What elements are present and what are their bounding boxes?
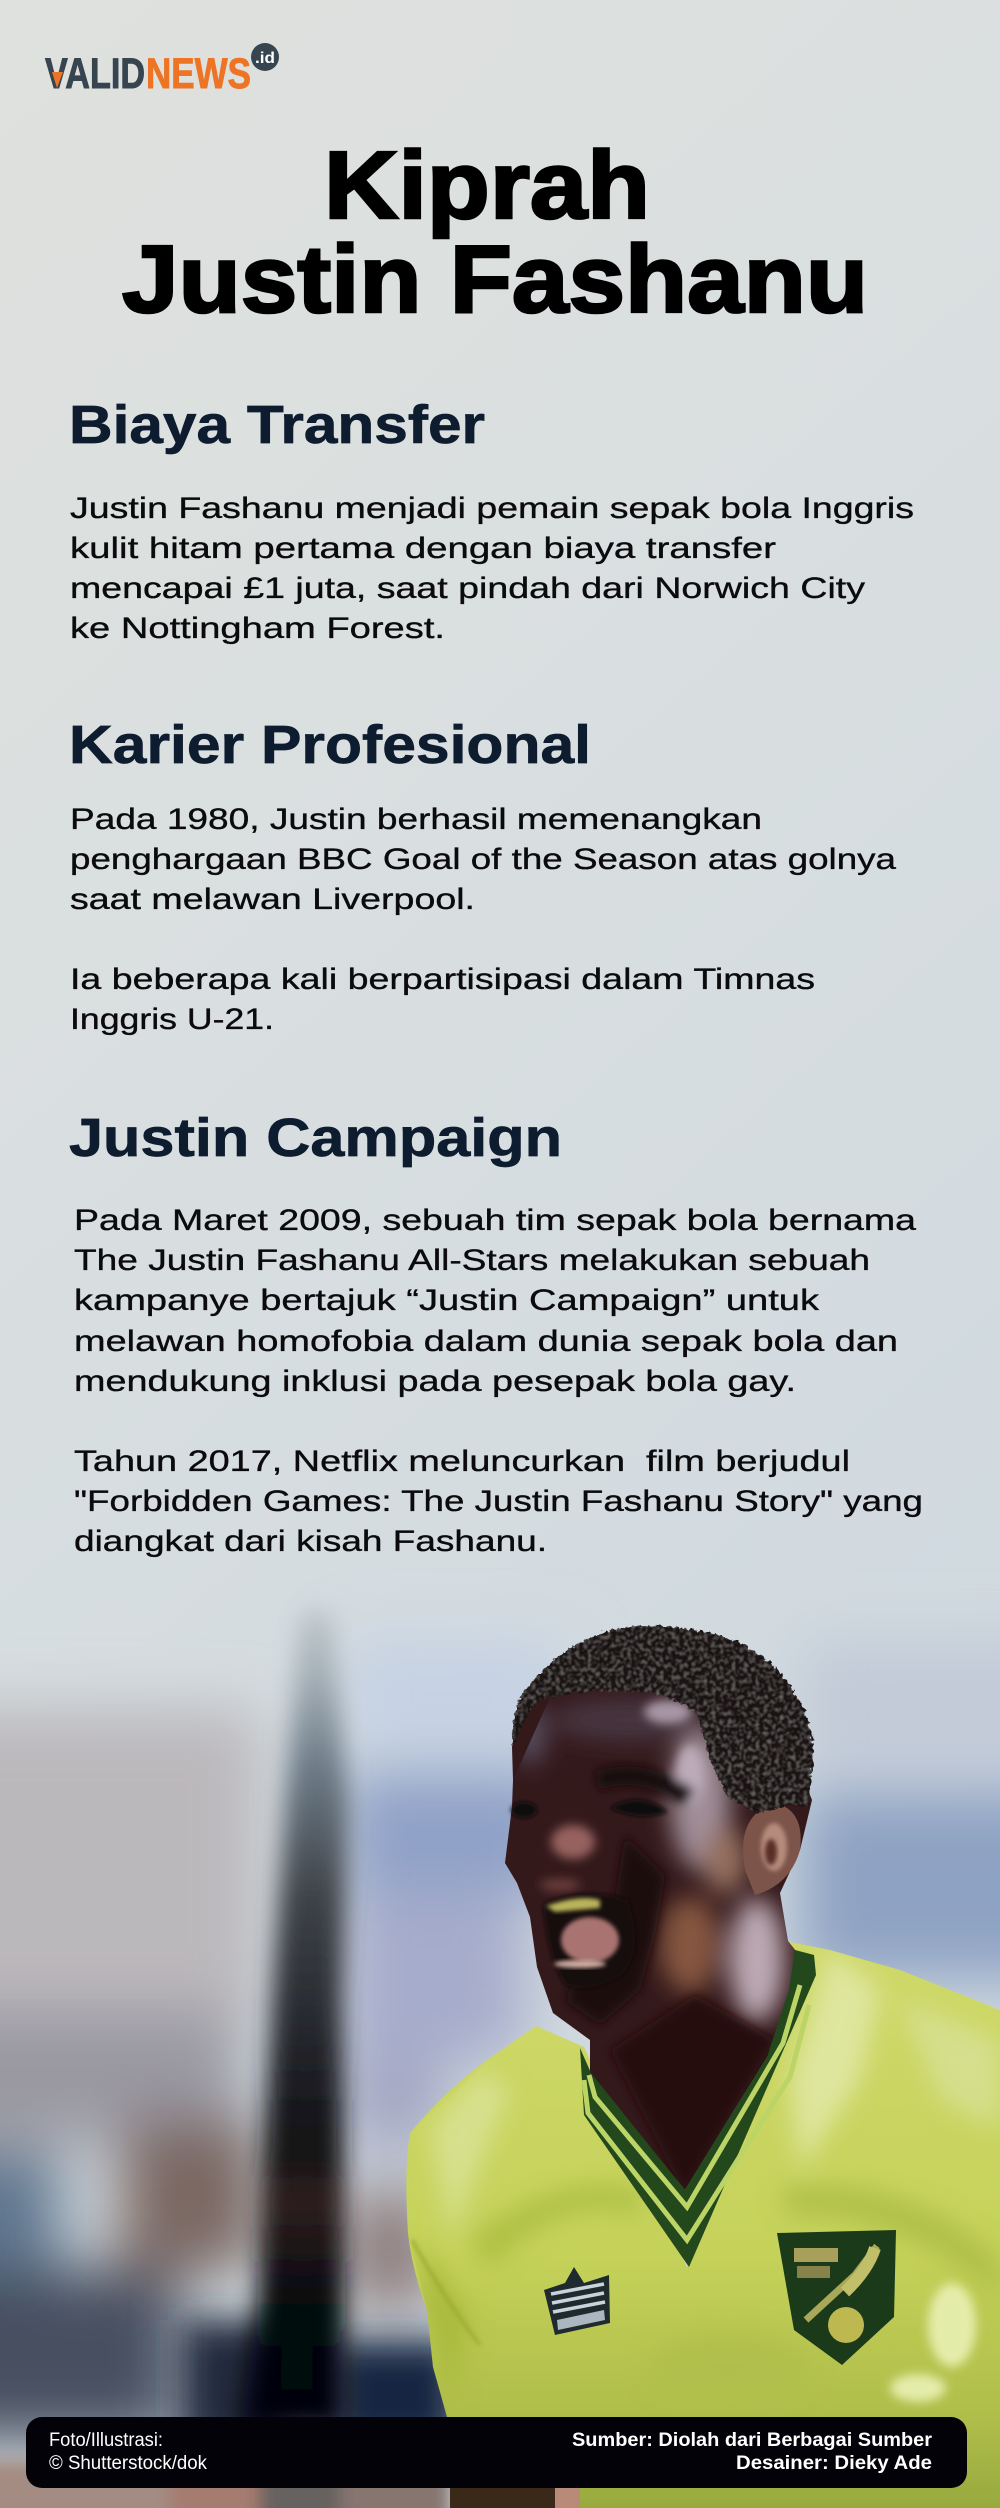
blurred navy patch beside pillar	[180, 2320, 460, 2450]
section: Karier Profesional	[69, 715, 896, 1036]
body text: kulit hitam pertama dengan biaya transfer	[70, 532, 776, 565]
blurred stadium background	[0, 1640, 1000, 2440]
body text: saat melawan Liverpool.	[70, 883, 475, 916]
body text: Pada 1980, Justin berhasil memenangkan	[70, 803, 762, 836]
body text	[70, 803, 896, 1036]
heading: Karier Profesional	[69, 715, 591, 775]
logo: Validnews.id: VALID	[45, 50, 145, 98]
body text: melawan homofobia dalam dunia sepak bola dan	[74, 1325, 898, 1358]
body text: diangkat dari kisah Fashanu.	[74, 1525, 547, 1558]
body text: Justin Fashanu menjadi pemain sepak bola Inggris	[70, 492, 914, 525]
badge: Admiral logo	[544, 2267, 610, 2335]
logo: Validnews.id: NEWS	[146, 50, 251, 98]
body text: Inggris U-21.	[70, 1003, 274, 1036]
source and designer credit: Sumber: Diolah dari Berbagai Sumber	[572, 2430, 933, 2451]
photo credit: Foto/Illustrasi:	[49, 2430, 163, 2451]
body text: penghargaan BBC Goal of the Season atas golnya	[70, 843, 896, 876]
body text: "Forbidden Games: The Justin Fashanu Story" yang	[74, 1485, 923, 1518]
title: Justin Fashanu	[122, 226, 868, 333]
body text: Ia beberapa kali berpartisipasi dalam Timnas	[70, 963, 815, 996]
heading: Biaya Transfer	[69, 395, 485, 455]
source and designer credit	[572, 2430, 933, 2474]
hair	[512, 1625, 813, 1813]
body text: ke Nottingham Forest.	[70, 612, 445, 645]
section: Biaya Transfer	[69, 395, 914, 645]
photo credit: © Shutterstock/dok	[49, 2453, 207, 2474]
body text: kampanye bertajuk “Justin Campaign” untuk	[74, 1284, 820, 1317]
ear	[743, 1803, 801, 1895]
body text: mencapai £1 juta, saat pindah dari Norwich City	[70, 572, 865, 605]
eyes	[511, 1800, 668, 1818]
dark strip below shirt at the bottom	[450, 2488, 555, 2508]
mouth	[543, 1893, 635, 1988]
body text	[74, 1204, 923, 1558]
title: Kiprah	[324, 132, 650, 239]
shirt	[406, 1942, 1000, 2508]
neck and face	[505, 1670, 815, 2195]
body text: Tahun 2017, Netflix meluncurkan film berjudul	[74, 1445, 850, 1478]
body text: The Justin Fashanu All-Stars melakukan sebuah	[74, 1244, 870, 1277]
logo: Validnews.id	[45, 43, 279, 98]
body text	[70, 492, 914, 645]
photo: Justin Fashanu shouting in yellow kit	[0, 1610, 1000, 2508]
section: Justin Campaign	[69, 1108, 923, 1558]
title	[122, 132, 868, 333]
footer credits bar	[26, 2417, 967, 2488]
photo credit	[49, 2430, 207, 2474]
logo: Validnews.id: .id	[255, 50, 275, 67]
source and designer credit: Desainer: Dieky Ade	[736, 2453, 932, 2474]
heading: Justin Campaign	[69, 1108, 562, 1168]
blurred dark pillar	[240, 1610, 348, 2430]
body text: mendukung inklusi pada pesepak bola gay.	[74, 1365, 796, 1398]
crest: Norwich City	[777, 2230, 896, 2365]
blurred ground strip under the credits bar	[0, 2460, 450, 2508]
body text: Pada Maret 2009, sebuah tim sepak bola bernama	[74, 1204, 916, 1237]
shirt collar: green V stripes	[580, 1950, 816, 2267]
shirt folds and highlights	[412, 1950, 1000, 2410]
